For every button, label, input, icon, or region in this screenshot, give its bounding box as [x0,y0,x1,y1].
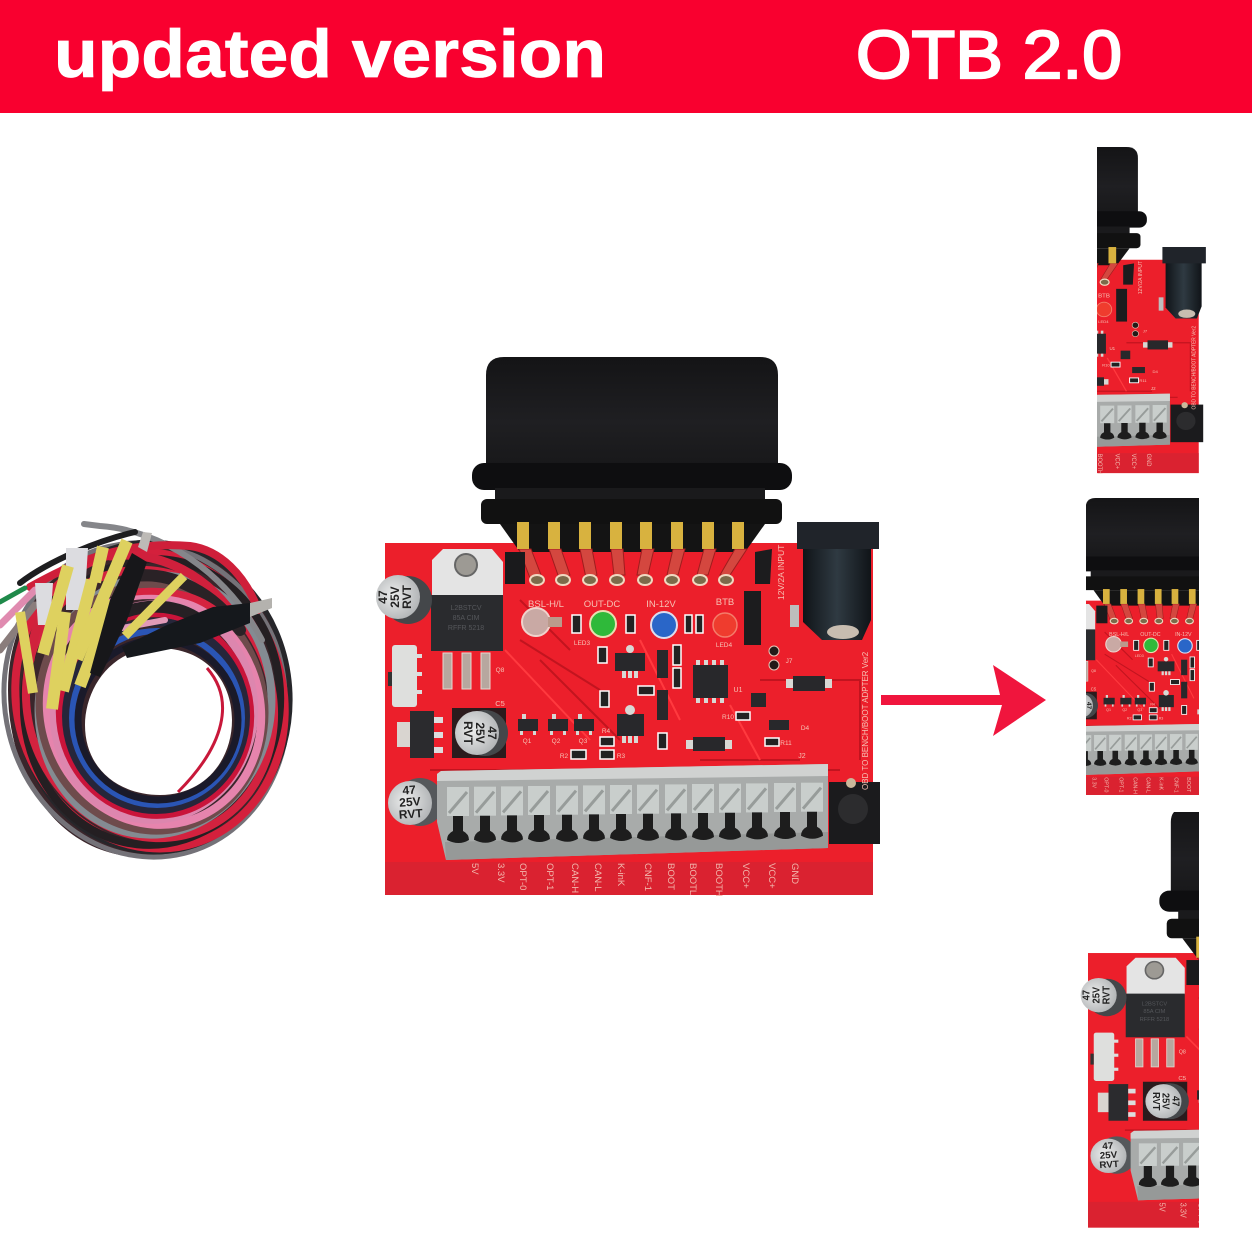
PCB [385,543,873,895]
pin labels: BOOT [665,863,676,890]
pin labels: VCC+ [740,863,751,889]
transistor Q7 [397,711,443,758]
LED labels: Q3 [579,738,588,745]
LED labels: R11 [780,740,792,747]
detail view: right side of board [1097,147,1206,474]
capacitor top-left: 47 [376,590,390,604]
voltage regulator [431,549,503,689]
header banner [0,0,1252,113]
OBD connector [472,357,792,552]
LED labels: R3 [617,753,626,760]
capacitor C6: 47 [402,783,417,797]
small resistors [571,615,779,759]
capacitor C6: RVT [398,806,424,822]
LEDs [522,608,737,638]
pin labels: OPT-1 [544,863,555,890]
LED labels: J2 [798,753,806,760]
LED labels: R2 [560,753,569,760]
gold pins and solder pads [517,522,747,585]
pin labels: 3.3V [495,863,506,883]
capacitor C5: RVT [461,721,475,746]
pin labels: BOOTL [687,863,698,895]
terminal block [437,764,828,860]
capacitor C5 [452,708,508,758]
LED labels: D4 [801,725,810,732]
voltage regulator: RFFR 5218 [448,625,484,632]
slide switch [388,645,422,707]
voltage regulator: L2BSTCV [450,605,482,612]
pin labels: CAN-H [569,863,580,893]
pin labels: CAN-L [592,863,603,892]
red arrow [881,665,1046,736]
capacitor C5: 25V [473,722,487,744]
capacitor top-left: 25V [388,586,402,608]
pin labels: VCC+ [766,863,777,889]
LED labels: Q1 [523,738,532,745]
LED labels: LED3 [574,640,591,647]
LED labels: R4 [602,728,611,735]
connector J3 [505,552,525,584]
heading: updated version: updated version [54,16,606,92]
LED labels: J7 [786,658,793,665]
pin labels: GND [789,863,800,884]
DC power jack [790,522,879,640]
push button block [829,778,880,844]
LED labels: IN-12V [646,599,676,610]
heading: OTB 2.0: OTB 2.0 [856,17,1122,93]
alligator clips [90,532,272,677]
header pins [744,549,772,645]
PCB: 12V/2A INPUT [776,545,786,600]
capacitor C5: 47 [485,726,499,740]
crimp terminals [35,548,88,625]
detail view: left side of board [1080,812,1199,1228]
capacitor C6: 25V [399,794,421,810]
voltage regulator: 85A CIM [453,615,480,622]
pin labels: OPT-0 [517,863,528,890]
main OTB adapter board [376,357,880,897]
LED labels: Q2 [552,738,561,745]
LED labels: BTB [716,597,734,608]
pin labels: K-inK [615,863,626,887]
LED labels [495,597,810,760]
pin labels: CNF-1 [642,863,653,891]
chips and transistors [518,645,832,751]
pin labels: 5V [469,863,480,875]
pin labels: BOOTH [713,863,724,897]
capacitor C6 [388,778,444,826]
LED labels: LED4 [716,642,733,649]
wire harness bundle [0,513,323,887]
capacitor top-left: RVT [400,584,414,609]
detail view: centre of board [1086,498,1199,795]
LED labels: C5 [495,699,505,708]
LED labels: BSL-H/L [528,599,564,610]
capacitor top-left [376,575,432,624]
LED labels: Q8 [496,667,505,674]
LED labels: R10 [722,714,734,721]
pin labels [469,863,800,897]
LED labels: U1 [734,687,743,694]
yellow heat-shrink tubes [20,541,184,709]
board edge label: OBD TO BENCH/BOOT ADPTER Ver2 [861,651,870,790]
LED labels: OUT-DC [584,599,620,610]
